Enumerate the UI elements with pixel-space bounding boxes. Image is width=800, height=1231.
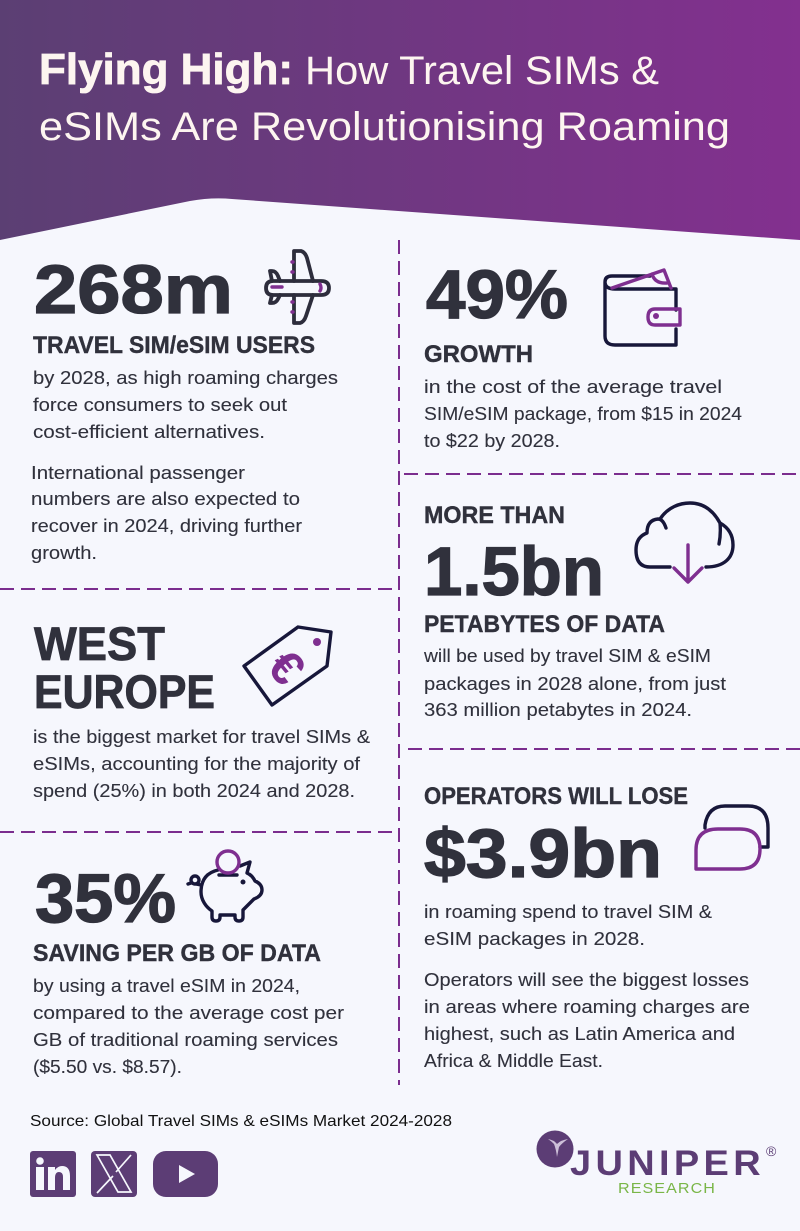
subheading: OPERATORS WILL LOSE xyxy=(424,783,688,810)
icon: euro price tag: € xyxy=(257,641,315,695)
source line: Source: Global Travel SIMs & eSIMs Market 2024-2028 xyxy=(30,1113,452,1130)
panel: West Europe xyxy=(33,617,371,801)
title: Flying High: xyxy=(39,45,293,94)
text block: compared to the average cost per xyxy=(33,1002,344,1023)
text block: to $22 by 2028. xyxy=(424,430,560,451)
icon: wallet xyxy=(605,270,680,345)
panel: 268m users xyxy=(31,251,338,563)
icon: LinkedIn xyxy=(30,1151,76,1197)
subheading: PETABYTES OF DATA xyxy=(424,611,665,638)
text block: ($5.50 vs. $8.57). xyxy=(33,1056,182,1077)
heading xyxy=(34,617,215,718)
text block: eSIM packages in 2028. xyxy=(424,928,645,949)
heading: WEST xyxy=(34,617,165,670)
text block: SIM/eSIM package, from $15 in 2024 xyxy=(424,403,742,424)
header banner xyxy=(0,0,800,240)
subheading: TRAVEL SIM/eSIM USERS xyxy=(33,332,315,359)
logo: Juniper Research: JUNIPER xyxy=(570,1144,765,1183)
text block: will be used by travel SIM & eSIM xyxy=(423,645,711,666)
text block: passengers: numbers are also expected to xyxy=(31,488,300,509)
text block: eSIMs, accounting for the majority of xyxy=(33,753,361,774)
logo: Juniper Research: RESEARCH xyxy=(618,1180,716,1197)
icon: YouTube xyxy=(153,1151,218,1197)
panel: 35% saving xyxy=(33,851,344,1077)
stat: 1.5bn: 1.5bn xyxy=(424,533,604,610)
panel: $3.9bn lost xyxy=(424,783,768,1071)
subheading: more than: MORE THAN xyxy=(424,502,565,529)
text block: by 2028, as high roaming charges xyxy=(33,367,338,388)
stat: $3.9bn: $3.9bn xyxy=(424,815,662,892)
text block: in the cost of the average travel xyxy=(424,376,722,397)
text block: losses: Africa & Middle East. xyxy=(424,1050,603,1071)
title xyxy=(39,45,730,149)
text block: by using a travel eSIM in 2024, xyxy=(33,975,300,996)
panel: 1.5bn petabytes xyxy=(423,502,733,720)
text block: force consumers to seek out xyxy=(33,394,287,415)
subheading: SAVING PER GB OF DATA xyxy=(33,940,321,967)
text block: passengers xyxy=(31,462,302,563)
text block xyxy=(33,367,338,442)
stat: 268m: 268m xyxy=(34,251,233,328)
logo: Juniper Research: ® xyxy=(766,1143,777,1159)
text block xyxy=(33,726,371,801)
icon: X xyxy=(91,1151,137,1197)
heading: EUROPE xyxy=(34,665,215,718)
text block: passengers: growth. xyxy=(31,542,97,563)
text block: spend (25%) in both 2024 and 2028. xyxy=(33,780,355,801)
text block: losses: in areas where roaming charges are xyxy=(424,996,750,1017)
text block: 363 million petabytes in 2024. xyxy=(424,699,692,720)
logo: Juniper Research xyxy=(536,1130,777,1197)
icon: plane xyxy=(266,251,329,323)
text block: in roaming spend to travel SIM & xyxy=(424,901,713,922)
icon: cloud download xyxy=(636,503,733,582)
text block: cost-efficient alternatives. xyxy=(33,421,265,442)
text block: passengers: recover in 2024, driving further xyxy=(31,515,302,536)
title: eSIMs Are Revolutionising Roaming xyxy=(39,105,730,149)
icon: euro price tag xyxy=(244,627,331,705)
text block: passengers: International passenger xyxy=(31,462,245,483)
title: How Travel SIMs & xyxy=(305,49,659,93)
text block: losses xyxy=(424,969,750,1071)
text block xyxy=(423,645,726,720)
text block xyxy=(424,901,713,949)
text block xyxy=(33,975,344,1077)
subheading: GROWTH xyxy=(424,341,533,368)
icon: speech bubbles xyxy=(696,806,768,869)
stat: 49%: 49% xyxy=(426,256,568,333)
icon: piggy bank xyxy=(188,851,262,921)
text block xyxy=(424,376,742,451)
panel: 49% growth xyxy=(424,256,742,451)
text block: losses: highest, such as Latin America and xyxy=(424,1023,735,1044)
text block: GB of traditional roaming services xyxy=(33,1029,338,1050)
text block: packages in 2028 alone, from just xyxy=(424,673,726,694)
stat: 35%: 35% xyxy=(35,860,176,937)
text block: losses: Operators will see the biggest losses xyxy=(424,969,749,990)
text block: is the biggest market for travel SIMs & xyxy=(33,726,371,747)
